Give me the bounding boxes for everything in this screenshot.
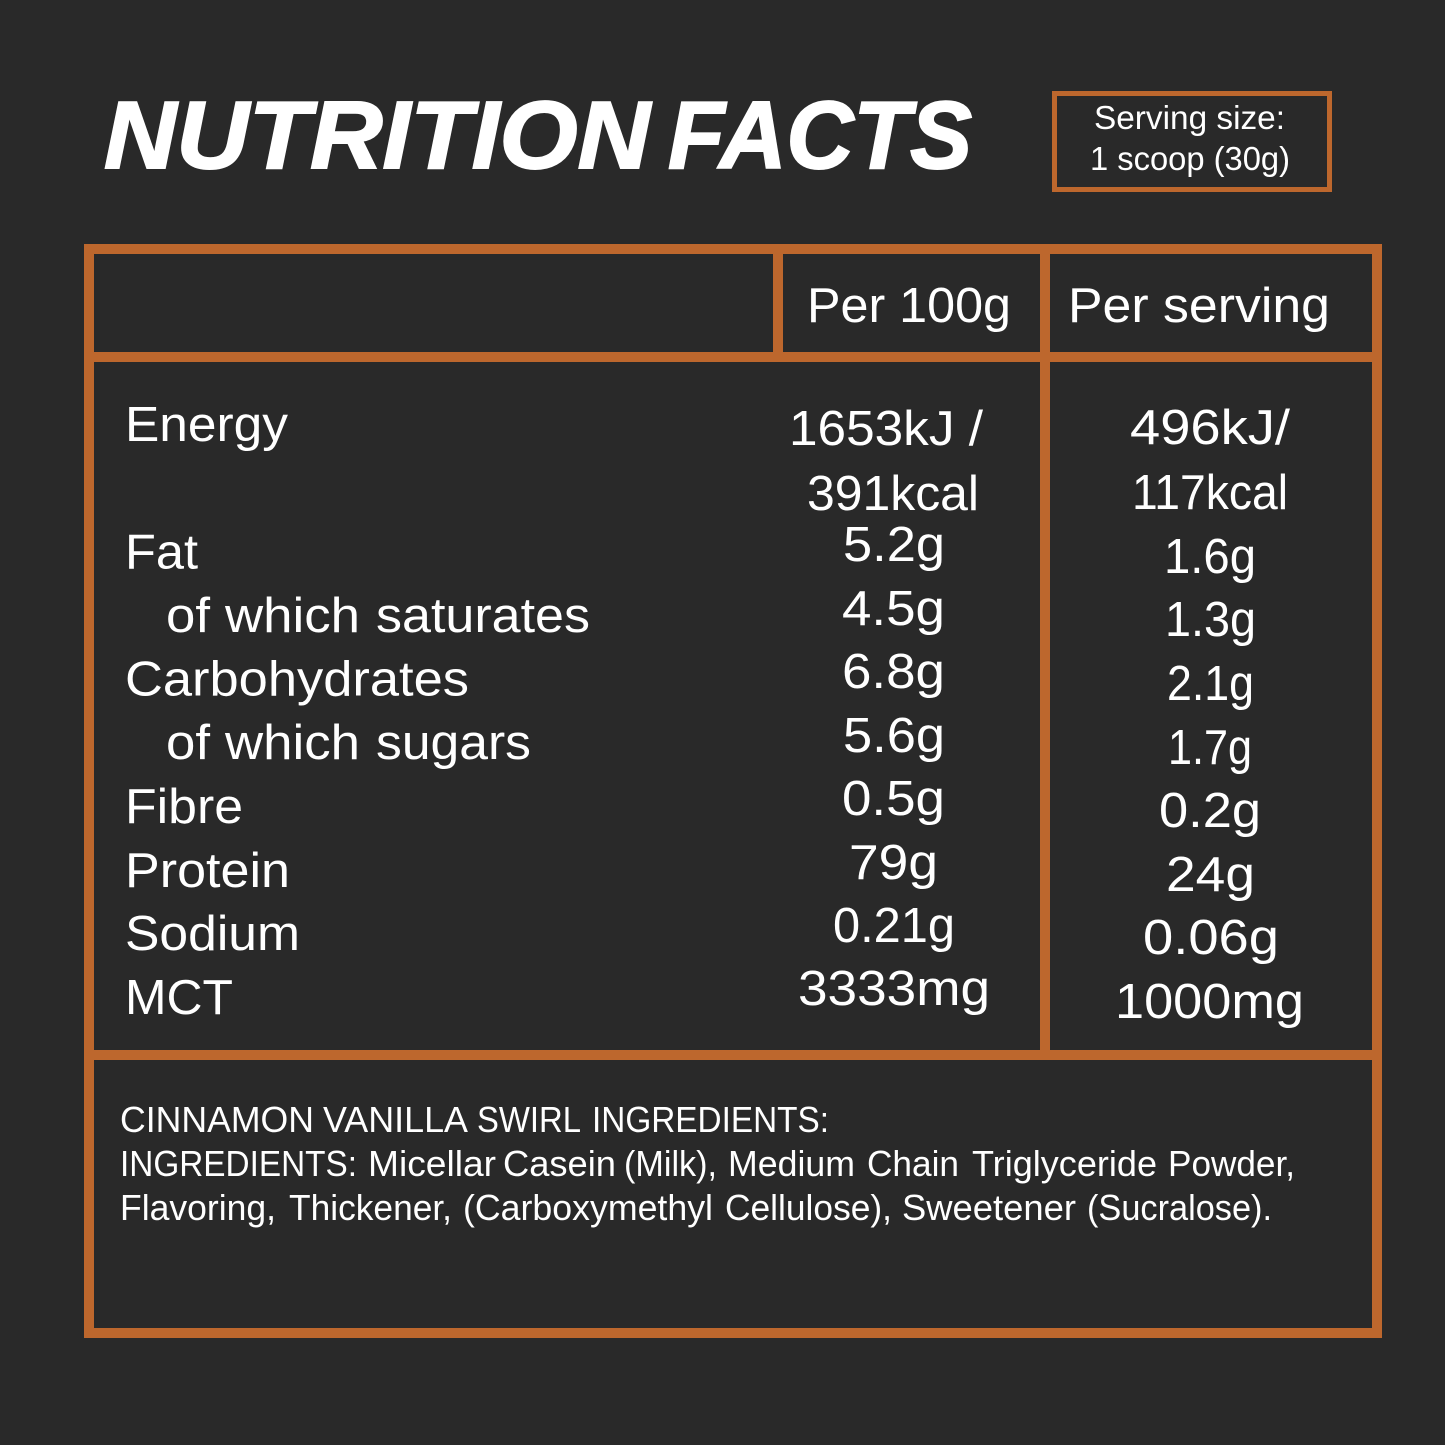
per serving values bbox=[1115, 401, 1304, 1029]
serving size box bbox=[1054, 94, 1330, 190]
title: NUTRITION bbox=[104, 82, 652, 189]
ingredients text: Micellar bbox=[368, 1143, 496, 1184]
per 100g values bbox=[789, 402, 990, 1016]
nutrient labels: sugars bbox=[376, 716, 531, 770]
title bbox=[104, 82, 972, 189]
ingredients text: VANILLA bbox=[323, 1099, 468, 1140]
per 100g values: 5.2g bbox=[843, 518, 945, 572]
nutrient labels: Carbohydrates bbox=[125, 652, 469, 706]
per serving values: 117kcal bbox=[1132, 466, 1288, 520]
nutrient labels bbox=[125, 398, 590, 1025]
table frame bbox=[84, 244, 1382, 1338]
ingredients text: (Milk), bbox=[624, 1143, 717, 1184]
nutrient labels: Energy bbox=[125, 398, 289, 452]
per serving values: 24g bbox=[1166, 848, 1255, 902]
ingredients text: Powder, bbox=[1168, 1143, 1295, 1184]
per serving values: 0.06g bbox=[1143, 911, 1279, 965]
per serving values: 496kJ/ bbox=[1130, 401, 1290, 455]
serving size box: 1 scoop (30g) bbox=[1090, 140, 1290, 177]
ingredients text bbox=[120, 1099, 1295, 1228]
per serving values: 1.6g bbox=[1164, 530, 1256, 584]
table header bbox=[807, 279, 1330, 333]
per 100g values: 3333mg bbox=[798, 962, 990, 1016]
ingredients text: (Carboxymethyl bbox=[463, 1187, 713, 1228]
per serving values: 1000mg bbox=[1115, 975, 1304, 1029]
nutrient labels: of bbox=[166, 716, 210, 770]
per serving values: 0.2g bbox=[1159, 784, 1261, 838]
nutrient labels: MCT bbox=[125, 971, 233, 1025]
serving size box: Serving size: bbox=[1094, 99, 1285, 136]
ingredients text: Thickener, bbox=[289, 1187, 452, 1228]
table header: Per serving bbox=[1068, 279, 1330, 333]
nutrient labels: of bbox=[166, 589, 210, 643]
per 100g values: 0.21g bbox=[833, 899, 955, 953]
per serving values: 1.3g bbox=[1165, 593, 1256, 647]
per 100g values: 79g bbox=[849, 836, 938, 890]
ingredients text: INGREDIENTS: bbox=[120, 1143, 357, 1184]
nutrient labels: which bbox=[224, 589, 360, 643]
per 100g values: 0.5g bbox=[842, 772, 945, 826]
nutrient labels: Protein bbox=[125, 844, 290, 898]
per serving values: 1.7g bbox=[1168, 721, 1252, 775]
ingredients text: Sweetener bbox=[902, 1187, 1076, 1228]
ingredients text: Flavoring, bbox=[120, 1187, 276, 1228]
ingredients text: Casein bbox=[503, 1143, 616, 1184]
per 100g values: 5.6g bbox=[843, 709, 945, 763]
ingredients text: Triglyceride bbox=[972, 1143, 1157, 1184]
per 100g values: 391kcal bbox=[807, 467, 979, 521]
table header: Per 100g bbox=[807, 279, 1011, 333]
nutrient labels: which bbox=[224, 716, 360, 770]
nutrient labels: Sodium bbox=[125, 907, 300, 961]
nutrient labels: Fat bbox=[125, 526, 198, 580]
per 100g values: 1653kJ / bbox=[789, 402, 983, 456]
ingredients text: CINNAMON bbox=[120, 1099, 314, 1140]
ingredients text: Medium bbox=[728, 1143, 855, 1184]
per serving values: 2.1g bbox=[1167, 657, 1254, 711]
title: FACTS bbox=[668, 82, 972, 189]
nutrient labels: saturates bbox=[376, 589, 590, 643]
ingredients text: INGREDIENTS: bbox=[592, 1099, 829, 1140]
ingredients text: Chain bbox=[867, 1143, 959, 1184]
nutrient labels: Fibre bbox=[125, 780, 243, 834]
nutrition table bbox=[84, 244, 1382, 1338]
ingredients text: Cellulose), bbox=[725, 1187, 892, 1228]
per 100g values: 6.8g bbox=[842, 645, 945, 699]
ingredients text: (Sucralose). bbox=[1087, 1187, 1272, 1228]
per 100g values: 4.5g bbox=[842, 582, 945, 636]
ingredients text: SWIRL bbox=[477, 1099, 581, 1140]
